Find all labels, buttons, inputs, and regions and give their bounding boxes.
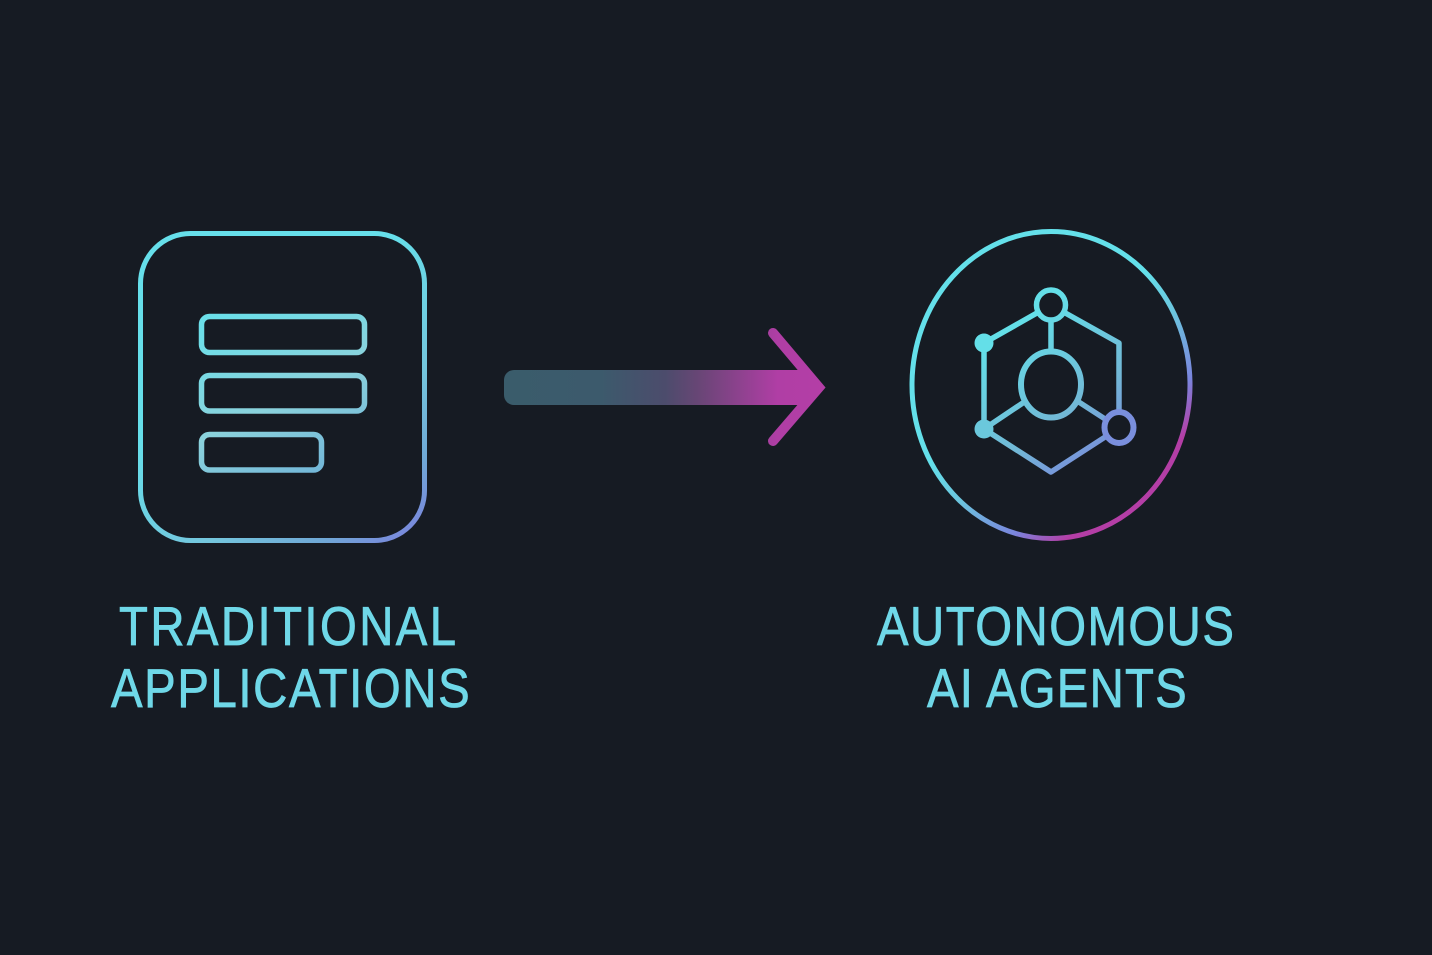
- arrow head: [773, 333, 819, 441]
- label: autonomous AI agents: [877, 596, 1234, 719]
- lower right node: [1104, 412, 1134, 443]
- list bar 1: [202, 316, 364, 352]
- list bar 2: [202, 376, 364, 411]
- icon: autonomous agent network: [912, 232, 1190, 538]
- outer circle: [912, 232, 1190, 538]
- arrow head fill: [790, 370, 820, 405]
- central node: [1021, 352, 1081, 418]
- arrow shaft: [504, 370, 800, 405]
- label line 1: TRADITIONAL: [119, 596, 456, 657]
- application frame: [140, 234, 424, 540]
- hexagon network edges: [984, 305, 1119, 472]
- label line 2: APPLICATIONS: [111, 658, 470, 719]
- list bar 3: [202, 434, 322, 470]
- label line 2: AI AGENTS: [927, 658, 1187, 719]
- upper left node: [974, 334, 994, 352]
- top node: [1036, 290, 1066, 320]
- label: traditional applications: [111, 596, 470, 719]
- arrow: transition from applications to agents: [504, 333, 820, 441]
- lower left node: [974, 420, 994, 438]
- icon: traditional application window: [140, 234, 424, 540]
- label line 1: AUTONOMOUS: [877, 596, 1234, 657]
